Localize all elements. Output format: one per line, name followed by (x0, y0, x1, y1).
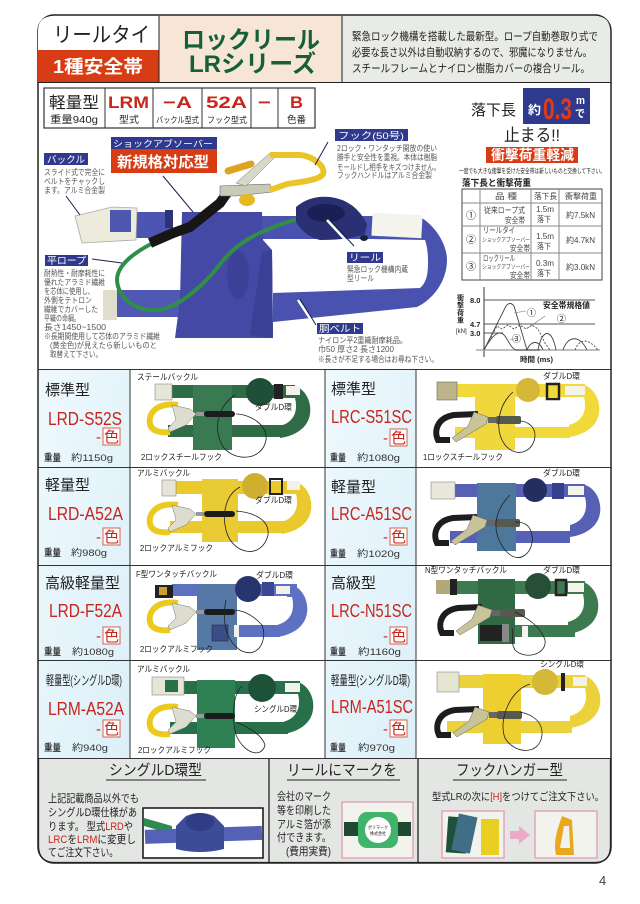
callout: waist belt: ※長さが不足する場合はお尋ね下さい。 (318, 354, 438, 364)
product: LRD-S52S: 重量 (44, 452, 61, 464)
product: LRD-A52A: アルミバックル (137, 468, 190, 478)
callout: reel (327, 219, 408, 283)
product: LRC-N51SC: 色 (391, 628, 406, 645)
callout: reel: 緊急ロック機構内蔵 (347, 264, 408, 274)
impact load chart: ① (527, 308, 536, 318)
impact load chart: 時間 (ms) (520, 354, 554, 364)
product: LRD-F52A (44, 569, 307, 658)
footer panel: reel mark: 付できます。 (277, 831, 331, 844)
product: LRM-A51SC: LRM-A51SC (331, 697, 413, 717)
product: LRD-S52S (44, 372, 310, 464)
comparison table: 落下 (537, 268, 551, 278)
product: LRD-A52A: ダブルD環 (255, 495, 292, 505)
comparison table: ② (466, 234, 476, 246)
footer panel: single D ring: 上記記載商品以外でも (48, 792, 139, 805)
comparison table: 安全帯 (505, 215, 525, 225)
callout: flat rope (44, 255, 160, 359)
footer panel: reel mark: 会社のマーク (277, 789, 331, 803)
callout: shock absorber (111, 137, 217, 212)
product: LRC-N51SC: 重量 (330, 646, 346, 658)
impact load chart: 荷 (457, 308, 464, 317)
product: LRD-A52A: LRD-A52A (48, 504, 123, 524)
header: series band: ロックリール (182, 27, 320, 54)
product: LRM-A52A: 重量 (44, 742, 61, 754)
model code table: −A (163, 93, 192, 112)
product: LRC-S51SC: - (383, 430, 388, 447)
comparison table (462, 189, 602, 280)
product: LRM-A52A: 軽量型(シングルD環) (46, 673, 122, 688)
comparison table: ショックアブソーバー (482, 263, 530, 271)
header: series band (38, 16, 611, 82)
callout: flat rope: 優れたアラミド繊維 (44, 277, 105, 287)
model code table: 色番 (287, 114, 306, 126)
comparison table: 1.5m (536, 205, 554, 214)
callout: waist belt: ナイロン平2重織耐摩耗品。 (318, 335, 407, 345)
product: LRD-S52S: 標準型 (45, 382, 90, 399)
footer panel: reel mark (269, 759, 418, 862)
comparison table: 衝撃荷重 (565, 191, 597, 201)
product: LRD-S52S: 2ロックスチールフック (141, 452, 222, 462)
impact load chart: 4.7 (470, 320, 480, 329)
header: series band: 1種安全帯 (53, 57, 143, 77)
product: LRD-A52A: - (96, 529, 101, 546)
comparison table: 安全帯 (510, 243, 530, 253)
footer panel: single D ring: てご注文下さい。 (48, 845, 118, 859)
product: LRC-N51SC: LRC-N51SC (331, 601, 412, 621)
footer panel: single D ring: シングルD環型 (109, 762, 202, 779)
comparison table: 約7.5kN (566, 210, 595, 220)
product: LRD-A52A: 2ロックアルミフック (140, 543, 213, 553)
callout: waist belt (298, 299, 438, 364)
product: LRC-A51SC: 約1020g (357, 548, 400, 560)
product: LRD-F52A: ダブルD環 (256, 570, 293, 580)
footer panel: reel mark: 株式会社 (370, 830, 386, 837)
product grid (38, 370, 611, 758)
impact load chart: 3.0 (470, 329, 480, 338)
header: series band: LRシリーズ (189, 50, 316, 78)
footer panel: single D ring: ります。 型式LRDや (48, 819, 133, 833)
callout: buckle: ベルトをチャックし (44, 177, 105, 186)
main belt photo (75, 153, 447, 338)
product: LRD-F52A: - (96, 628, 101, 645)
callout: flat rope: (黄金色)が見えたら新しいものと (50, 340, 157, 350)
callout: buckle: ます。アルミ合金製 (44, 185, 105, 195)
fall distance headline: で (575, 108, 585, 120)
model code table: 重量940g (50, 113, 98, 126)
impact load chart: [kN] (456, 329, 467, 335)
comparison table: 落下 (537, 214, 551, 224)
product: LRM-A52A: 色 (104, 721, 119, 738)
product: LRC-N51SC: 高級型 (331, 575, 376, 592)
callout: hook: 勝手と安全性を重視。本体は樹脂 (337, 152, 437, 162)
comparison table: 従来ロープ式 (484, 205, 525, 215)
product: LRM-A51SC: シングルD環 (540, 659, 584, 669)
fall distance headline: m (576, 95, 585, 107)
footer panel: single D ring: LRCをLRMに変更し (48, 833, 136, 846)
fall distance headline (459, 88, 605, 188)
product: LRC-S51SC (330, 371, 599, 464)
product: LRD-F52A: 約1080g (72, 646, 114, 658)
comparison table: 落下長 (534, 191, 557, 201)
product: LRC-A51SC: - (383, 529, 388, 546)
product: LRD-F52A: LRD-F52A (49, 601, 122, 621)
product: LRM-A52A (44, 664, 313, 755)
product: LRC-N51SC (330, 565, 598, 658)
product: LRC-S51SC: ダブルD環 (543, 371, 580, 381)
product: LRD-S52S: - (96, 429, 101, 446)
product: LRM-A51SC: - (383, 721, 388, 738)
callout: flat rope: 平織の命綱。 (44, 313, 80, 323)
product: LRD-A52A: 重量 (44, 547, 61, 559)
comparison table: ③ (466, 261, 476, 273)
callout: flat rope: 平ロープ (47, 256, 87, 267)
callout: hook: モールドし相手をキズつけません。 (337, 162, 440, 172)
product: LRC-A51SC: LRC-A51SC (331, 504, 412, 524)
model code table: バックル型式 (156, 115, 199, 125)
header: description text: 緊急ロック機構を搭載した最新型。ロープ自動巻取り式で (352, 29, 598, 43)
footer panel: hook hanger: 型式LRの次に[H]をつけてご注文下さい。 (432, 790, 604, 803)
fall distance headline: 衝撃荷重軽減 (491, 147, 574, 163)
product: LRM-A51SC: 軽量型(シングルD環) (331, 673, 410, 688)
callout: hook (315, 129, 440, 180)
footer panel: hook hanger: フックハンガー型 (456, 762, 563, 779)
product: LRC-S51SC: 標準型 (331, 381, 376, 398)
impact load chart: 8.0 (470, 296, 480, 305)
header: description text: 必要な長さ以外は自動収納するので、邪魔になりません。 (352, 45, 592, 59)
comparison table: 品 種 (495, 191, 517, 201)
product: LRD-A52A: 軽量型 (45, 477, 90, 494)
callout: flat rope: 繊維でカバーした (44, 304, 98, 314)
product: LRC-A51SC: 重量 (330, 548, 346, 560)
product: LRC-N51SC: N型ワンタッチバックル (425, 565, 507, 575)
product: LRC-A51SC: ダブルD環 (543, 468, 580, 478)
impact load chart: 安全帯規格値 (543, 300, 590, 310)
product: LRC-S51SC: 色 (391, 430, 406, 447)
callout: flat rope: を芯体に使用し、 (44, 286, 94, 296)
product: LRM-A52A: アルミバックル (137, 664, 190, 674)
comparison table: 落下 (537, 241, 551, 251)
impact load chart: 重 (457, 316, 464, 324)
comparison table: 1.5m (536, 232, 554, 241)
product: LRD-F52A: F型ワンタッチバックル (136, 569, 217, 579)
product: LRM-A51SC: 重量 (330, 742, 346, 754)
fall distance headline: 止まる!! (504, 126, 560, 145)
product: LRM-A52A: 2ロックアルミフック (138, 745, 211, 755)
impact load chart: ③ (512, 334, 521, 344)
footer panel: hook hanger (418, 759, 610, 862)
product: LRD-S52S: 約1150g (71, 452, 113, 464)
product: LRD-S52S: ステールバックル (137, 372, 198, 382)
callout: buckle (44, 153, 105, 215)
impact load chart: 衝 (457, 293, 464, 302)
fall distance headline: 落下長と衝撃荷重 (462, 177, 531, 188)
fall distance headline: 落下長 (471, 102, 516, 119)
footer panel: reel mark: ボリマーク (368, 824, 388, 831)
impact load chart (456, 287, 600, 364)
header: description text: スチールフレームとナイロン樹脂カバーの複合リール。 (352, 61, 590, 75)
product: LRD-F52A: 色 (104, 628, 119, 645)
header: description text (352, 29, 598, 75)
comparison table: ショックアブソーバー (482, 236, 530, 244)
product: LRD-S52S: ダブルD環 (255, 402, 292, 412)
callout: shock absorber: 新規格対応型 (117, 153, 209, 171)
callout: flat rope: ※長期間使用して芯体のアラミド繊維 (44, 331, 160, 341)
callout: buckle: スライド式で完全に (44, 167, 105, 177)
product: LRC-S51SC: LRC-S51SC (331, 407, 412, 427)
callout: reel: リール (349, 253, 382, 264)
impact load chart: 撃 (457, 300, 464, 310)
product: LRC-N51SC: ダブルD環 (543, 565, 580, 575)
comparison table: リールタイ (483, 226, 515, 235)
product: LRM-A52A: LRM-A52A (48, 699, 124, 719)
callout: flat rope: 取替えて下さい。 (50, 349, 102, 359)
product: LRC-N51SC: 約1160g (358, 646, 401, 658)
product: LRD-F52A: 2ロックアルミフック (140, 644, 213, 654)
comparison table: 安全帯 (510, 270, 530, 280)
product: LRC-A51SC (330, 468, 600, 560)
product: LRC-N51SC: - (383, 628, 388, 645)
product: LRD-S52S: LRD-S52S (48, 409, 122, 429)
callout: reel: 型リール (347, 274, 374, 283)
product: LRM-A52A: - (96, 721, 101, 738)
product: LRM-A51SC (330, 659, 600, 754)
product: LRD-F52A: 高級軽量型 (45, 575, 120, 592)
product: LRD-S52S: 色 (104, 429, 119, 446)
product: LRC-S51SC: 約1080g (357, 452, 400, 464)
footer frame lines (38, 758, 610, 862)
callout: buckle: バックル (47, 155, 86, 166)
model code table: B (290, 93, 303, 112)
callout: flat rope: 外側をテトロン (44, 295, 92, 305)
comparison table: 0.3m (536, 259, 554, 268)
product: LRD-A52A: 色 (104, 529, 119, 546)
comparison table: 約4.7kN (566, 235, 595, 245)
product: LRM-A52A: 約940g (72, 742, 108, 754)
model code table: 52A (206, 93, 247, 112)
product: LRC-A51SC: 色 (391, 529, 406, 546)
model code table: 軽量型 (49, 94, 99, 112)
callout: hook: フック(50号) (338, 131, 404, 142)
callout: waist belt: 巾50 厚さ2 長さ1200 (318, 344, 395, 354)
comparison table: ロックリール (483, 254, 515, 263)
model code table: LRM (108, 93, 149, 112)
footer panel: reel mark: 等を印刷した (277, 803, 331, 817)
model code table: 型式 (119, 114, 140, 126)
product: LRC-A51SC: 軽量型 (331, 479, 376, 496)
header: series band: リールタイ (53, 24, 150, 47)
fall distance headline: 約 (528, 102, 541, 117)
fall distance headline: 0.3 (543, 93, 572, 126)
comparison table: 約3.0kN (566, 262, 595, 272)
product: LRD-A52A (44, 468, 311, 559)
callout: flat rope: 長さ1450~1500 (44, 323, 107, 332)
callout: flat rope: 耐熱性・耐摩耗性に (44, 268, 105, 278)
footer panel: reel mark: アルミ箔が添 (277, 817, 331, 831)
model code table: − (258, 93, 271, 112)
footer panel: single D ring: シングルD環仕様があ (48, 805, 137, 819)
impact load chart: ② (557, 314, 566, 324)
product: LRD-A52A: 約980g (71, 547, 107, 559)
product: LRD-F52A: 重量 (44, 646, 61, 658)
model code table: フック型式 (207, 115, 247, 125)
footer panel: reel mark: (費用実費) (286, 844, 331, 858)
footer panel: single D ring (39, 759, 269, 862)
product: LRM-A51SC: 約970g (358, 742, 395, 754)
callout: waist belt: 胴ベルト (319, 324, 361, 335)
product: LRC-S51SC: 1ロックスチールフック (423, 452, 503, 462)
page number: 4 (599, 873, 606, 888)
callout: hook: 2ロック・ワンタッチ開放の使い (337, 143, 437, 153)
product: LRC-S51SC: 重量 (330, 452, 346, 464)
model code table (44, 88, 315, 128)
callout: hook: フックハンドルはアルミ合金製 (337, 170, 432, 180)
callout: shock absorber: ショックアブソーバー (113, 138, 213, 149)
comparison table: ① (466, 210, 476, 222)
product: LRM-A52A: シングルD環 (254, 704, 297, 714)
product: LRM-A51SC: 色 (391, 721, 406, 738)
footer panel: reel mark: リールにマークを (287, 762, 397, 779)
